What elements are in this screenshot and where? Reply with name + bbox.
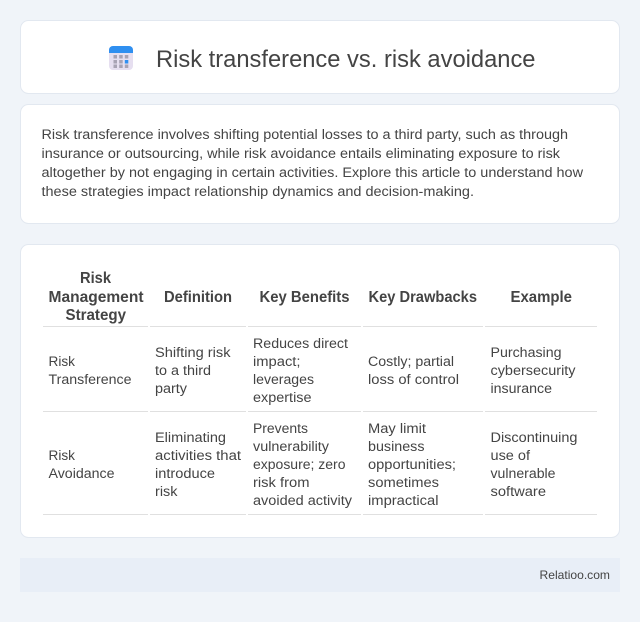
cell: definition [155, 430, 241, 500]
cell: drawbacks: May limit [368, 421, 426, 437]
cell: drawbacks [368, 421, 456, 509]
header: key benefits: Key Benefits [260, 289, 350, 306]
cell: benefits: impact; [253, 354, 300, 370]
cell: example: insurance [490, 381, 552, 397]
header: risk management strategy [48, 270, 144, 324]
cell: benefits [253, 336, 348, 406]
cell: drawbacks: sometimes [368, 475, 439, 491]
panel: introduction [20, 104, 620, 224]
cell: example: cybersecurity [490, 363, 576, 379]
cell: drawbacks: business [368, 439, 424, 455]
cell: definition: to a third [155, 363, 211, 379]
cell: example [490, 430, 578, 500]
cell: definition: risk [155, 484, 178, 500]
cell: benefits: vulnerability [253, 439, 330, 455]
table row: risk avoidance [48, 421, 578, 509]
text block: introduction [42, 127, 584, 200]
cell: drawbacks [368, 354, 459, 388]
cell: strategy name: Transference [48, 372, 132, 388]
header: key drawbacks: Key Drawbacks [368, 289, 477, 306]
cell: definition: Shifting risk [155, 345, 231, 361]
cell: definition: introduce [155, 466, 215, 482]
cell: drawbacks: loss of control [368, 372, 459, 388]
cell: benefits: avoided activity [253, 493, 353, 509]
header: example: Example [510, 289, 572, 306]
cell: definition [155, 345, 231, 397]
table row: risk transference [48, 336, 576, 406]
cell: benefits: exposure; zero [253, 457, 346, 473]
cell: definition: party [155, 381, 188, 397]
cell: benefits: expertise [253, 390, 312, 406]
cell: definition: activities that [155, 448, 241, 464]
footer bar [20, 558, 620, 592]
cell: strategy name: Risk [48, 448, 76, 464]
cell: benefits: risk from [253, 475, 310, 491]
cell: example: vulnerable [490, 466, 556, 482]
text block: introduction: altogether by not engaging in certain activities. Explore this article to understand how [42, 165, 584, 181]
panel: comparison table [20, 244, 620, 538]
cell: benefits: Prevents [253, 421, 308, 437]
header: definition: Definition [164, 289, 232, 306]
cell: example [490, 345, 576, 397]
panel: title card [20, 20, 620, 94]
cell: strategy name: Risk [48, 354, 76, 370]
table header row [48, 270, 572, 324]
cell: example: software [490, 484, 546, 500]
cell: example: Purchasing [490, 345, 562, 361]
footer source label: Relatioo.com [540, 568, 610, 582]
cell: definition: Eliminating [155, 430, 226, 446]
cell: benefits [253, 421, 353, 509]
text block: introduction: Risk transference involves shifting potential losses to a third party, such as through [42, 127, 568, 143]
cell: example: use of [490, 448, 530, 464]
cell: strategy name: Avoidance [48, 466, 115, 482]
icon: calendar [109, 46, 133, 70]
header: risk management strategy: Risk [80, 270, 111, 287]
cell: example: Discontinuing [490, 430, 578, 446]
cell: drawbacks: opportunities; [368, 457, 456, 473]
cell: benefits: Reduces direct [253, 336, 348, 352]
title: Risk transference vs. risk avoidance [156, 46, 536, 73]
cell: drawbacks: Costly; partial [368, 354, 454, 370]
cell: benefits: leverages [253, 372, 314, 388]
text block: introduction: these strategies impact relationship dynamics and decision-making. [42, 184, 474, 200]
cell: strategy name [48, 448, 115, 482]
text block: introduction: insurance or outsourcing, while risk avoidance entails eliminating exposure to risk [42, 146, 561, 162]
cell: strategy name [48, 354, 132, 388]
cell: drawbacks: impractical [368, 493, 438, 509]
header: risk management strategy: Management [48, 289, 144, 306]
header: risk management strategy: Strategy [66, 307, 126, 324]
